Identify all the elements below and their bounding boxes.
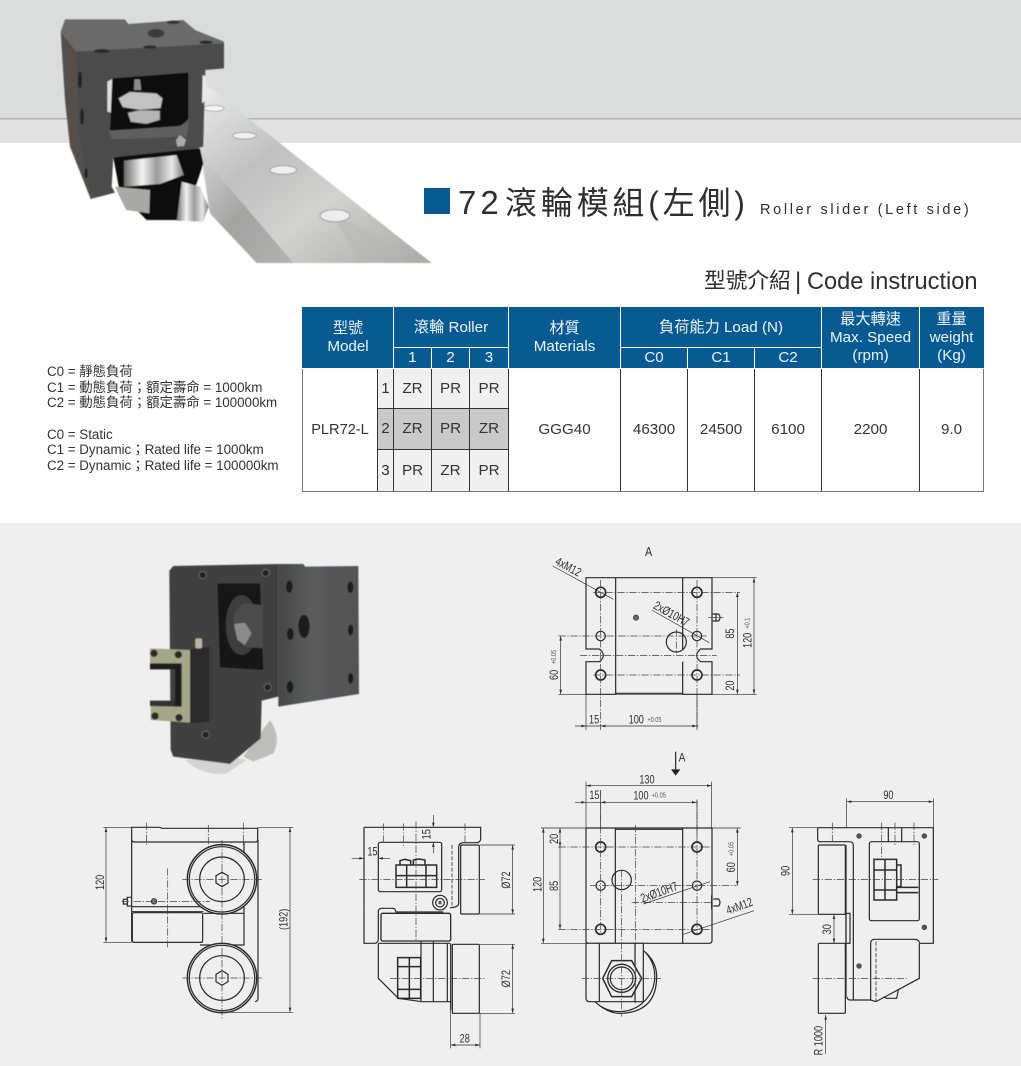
callout 2xØ10H7 — [639, 880, 710, 906]
dimensions: +0.05 — [728, 841, 736, 856]
drawing: top view A — [548, 545, 757, 730]
dimensions: 15 — [589, 713, 599, 727]
specification table: Model — [327, 338, 369, 355]
callout 4xM12 — [683, 896, 755, 934]
hex nuts — [118, 79, 186, 147]
nuts — [874, 859, 918, 900]
dimensions: 120 — [741, 633, 755, 648]
specification table: 1 — [381, 380, 390, 396]
specification table: 1 — [408, 349, 417, 366]
specification table: C0 — [644, 349, 664, 366]
body outline — [364, 827, 481, 1002]
drawing: A-direction elevation — [531, 752, 755, 1017]
window — [217, 583, 263, 670]
dimensions — [352, 815, 515, 1048]
lower bracket — [871, 943, 919, 1002]
specification table: 3 — [485, 349, 493, 366]
centre lines — [558, 790, 737, 1017]
body side — [278, 564, 359, 707]
centre lines — [813, 823, 938, 978]
dimensions: 20 — [724, 681, 737, 691]
centre lines — [122, 823, 262, 1018]
dimensions: +0.1 — [744, 617, 752, 629]
window — [869, 842, 919, 921]
dimensions: 85 — [724, 629, 737, 639]
callout 2xØ10H7: 2xØ10H7 — [651, 599, 691, 630]
load rating notes — [47, 364, 279, 473]
specification table: PLR72-L — [311, 422, 369, 438]
dimensions — [779, 789, 933, 1055]
plate inner lines — [615, 828, 683, 943]
holes — [596, 842, 720, 934]
dimensions: 15 — [589, 789, 599, 802]
specification table: C2 — [778, 349, 798, 366]
wheel — [595, 951, 657, 1013]
specification table: ZR — [402, 420, 423, 437]
load rating notes: C2 = 動態負荷；額定壽命 = 100000km — [47, 395, 277, 410]
heading: code instruction: | — [795, 268, 801, 295]
specification table: 2 — [446, 349, 455, 366]
dimensions: 130 — [639, 773, 655, 787]
load rating notes: C0 = 靜態負荷 — [47, 364, 133, 379]
specification table: C1 — [711, 349, 731, 366]
dimensions: 15 — [367, 845, 377, 859]
rail — [200, 83, 432, 263]
specification table: PR — [478, 462, 500, 478]
dimensions: 90 — [883, 789, 893, 802]
specification table: 重量 — [936, 311, 967, 328]
dimensions: 85 — [548, 881, 561, 891]
body outline — [132, 827, 258, 1002]
heading: code instruction: 型號介紹 — [704, 268, 791, 293]
specification table: GGG40 — [538, 421, 591, 438]
screws — [199, 569, 271, 738]
specification table: ZR — [402, 380, 423, 396]
specification table: 最大轉速 — [840, 311, 901, 328]
body front — [169, 564, 278, 764]
specification table: PR — [402, 462, 423, 478]
title — [424, 184, 971, 221]
dimensions: Ø72 — [500, 871, 513, 889]
view label A: A — [645, 545, 652, 559]
lower hub — [421, 942, 451, 1010]
dimensions: 15 — [420, 829, 434, 839]
lower roller — [452, 944, 479, 1013]
dimensions — [531, 773, 741, 943]
load rating notes: C1 = 動態負荷；額定壽命 = 1000km — [47, 380, 262, 395]
hidden bracket line — [875, 942, 877, 1002]
callout 4xM12: 4xM12 — [553, 555, 583, 580]
grease nipple — [195, 638, 202, 648]
title chinese: 滾輪模組(左側) — [505, 185, 749, 221]
specification table: 2200 — [854, 421, 887, 438]
load rating notes: C1 = Dynamic；Rated life = 1000km — [47, 442, 264, 457]
dimensions: 30 — [821, 924, 834, 934]
eccentric bolt — [433, 895, 447, 910]
dimensions: (192) — [277, 909, 291, 930]
grease nipple — [123, 897, 157, 906]
specification table: 材質 — [549, 320, 580, 337]
specification table: ZR — [479, 420, 499, 437]
dimensions: Ø72 — [500, 970, 513, 987]
specification table: 9.0 — [941, 421, 962, 438]
hex nut — [603, 961, 642, 997]
dimensions — [94, 827, 293, 1012]
specification table: PR — [440, 380, 461, 396]
upper nuts — [396, 859, 437, 887]
bracket inner lines — [599, 943, 635, 1002]
dimensions: 100 — [633, 789, 649, 803]
load rating notes: C0 = Static — [47, 427, 113, 442]
specification table: 46300 — [633, 421, 675, 438]
centre lines — [359, 822, 485, 978]
dimensions: 28 — [460, 1032, 470, 1046]
dimensions: +0.05 — [550, 649, 558, 664]
holes — [596, 587, 720, 680]
side holes — [286, 581, 353, 693]
specification table: 6100 — [771, 421, 805, 438]
lower nuts — [398, 958, 421, 998]
specification table: (Kg) — [937, 347, 966, 364]
drawing panel background — [0, 523, 1021, 1066]
dimensions: +0.05 — [647, 716, 662, 724]
wiper bracket — [150, 648, 190, 723]
title square — [424, 188, 450, 214]
specification table — [302, 307, 984, 492]
callout 2xØ10H7: 2xØ10H7 — [639, 880, 680, 906]
specification table: Materials — [534, 338, 595, 355]
header band — [0, 0, 1021, 143]
window — [378, 842, 442, 892]
dimensions: +0.05 — [652, 792, 666, 800]
specification table: 24500 — [700, 421, 742, 438]
centre lines — [558, 580, 740, 730]
hidden guide line — [451, 845, 453, 908]
dimensions: 90 — [779, 866, 793, 876]
callout 2xØ10H7 — [651, 599, 709, 643]
title english: Roller slider (Left side) — [760, 202, 971, 218]
title number: 72 — [458, 184, 503, 221]
dimensions — [548, 578, 757, 730]
specification table: (rpm) — [852, 347, 889, 364]
specification table: 3 — [381, 462, 390, 478]
dimensions: 20 — [548, 834, 561, 844]
specification table: ZR — [440, 462, 461, 478]
slider block — [61, 19, 224, 199]
specification table: weight — [930, 329, 973, 346]
drawing: left elevation — [94, 823, 293, 1018]
dimensions: 120 — [531, 877, 545, 892]
specification table: PR — [478, 380, 500, 396]
specification table: 2 — [381, 420, 390, 437]
dimensions: 60 — [725, 862, 738, 872]
plate outline — [586, 578, 712, 694]
body outline — [818, 828, 933, 1000]
dimensions: 120 — [94, 875, 107, 890]
dimensions: 60 — [548, 670, 561, 680]
dark mount block — [190, 647, 209, 723]
specification table: Max. Speed — [830, 329, 911, 346]
callout 4xM12 — [553, 555, 613, 599]
rollers — [185, 720, 277, 774]
drawing: right elevation — [779, 789, 938, 1055]
roller block — [132, 913, 203, 942]
drawing: front section — [352, 815, 515, 1048]
specification table: 滾輪 Roller — [414, 318, 488, 336]
product photo: slider assembly — [150, 564, 359, 774]
lower bracket — [586, 943, 643, 1002]
guide roller — [381, 913, 451, 941]
load rating notes: C2 = Dynamic；Rated life = 100000km — [47, 458, 279, 473]
screws — [857, 834, 927, 968]
callout 4xM12: 4xM12 — [724, 896, 755, 918]
dimensions: R 1000 — [812, 1026, 826, 1055]
specification table: 型號 — [333, 320, 363, 337]
specification table: 負荷能力 Load (N) — [659, 318, 783, 336]
hero photo: roller slider on rail — [61, 19, 432, 263]
heading: code instruction: Code instruction — [807, 269, 978, 295]
rollers — [818, 845, 850, 1013]
rollers — [187, 845, 257, 1013]
heading: code instruction — [704, 268, 978, 295]
arrow A — [671, 752, 686, 776]
plate — [586, 828, 712, 943]
specification table: PR — [440, 420, 461, 437]
dimensions: 100 — [629, 713, 644, 727]
upper roller — [461, 845, 479, 914]
roller assembly — [113, 148, 209, 222]
arrow A: A — [679, 752, 686, 765]
